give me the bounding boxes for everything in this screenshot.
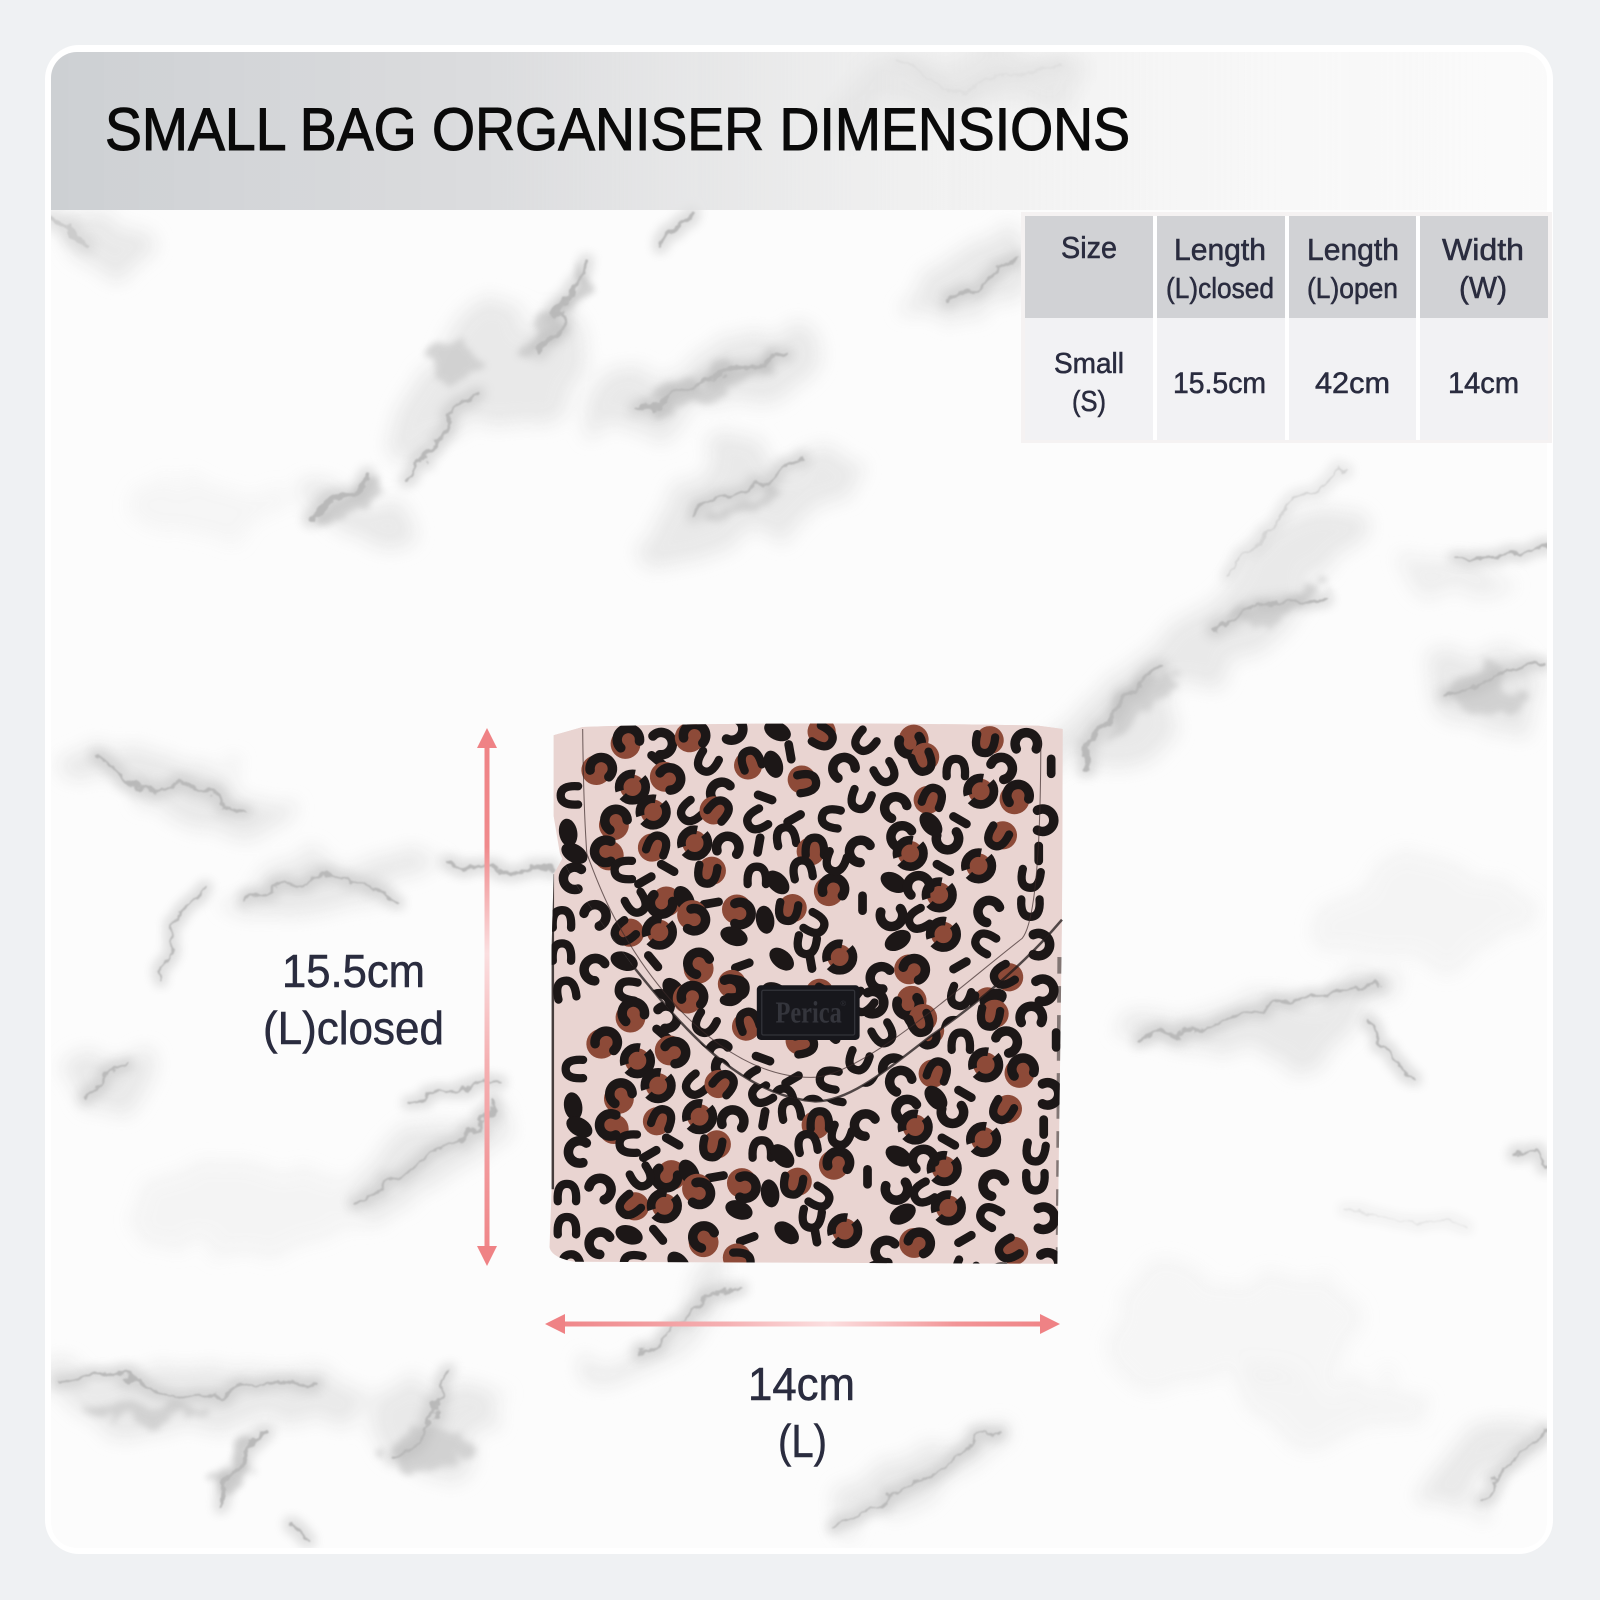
bag photo: leopard print organiser — [545, 712, 1068, 1295]
flap stitching — [583, 729, 1041, 1077]
table text: 14cm — [1448, 367, 1519, 400]
arrow: vertical dimension — [477, 728, 497, 1266]
table text: Length — [1174, 232, 1266, 267]
brand badge — [757, 985, 860, 1040]
table text: 42cm — [1315, 367, 1390, 400]
table text: Width — [1442, 232, 1524, 267]
table text: 15.5cm — [1173, 367, 1266, 400]
label: width: (L) — [778, 1415, 827, 1467]
table text: (L)closed — [1166, 273, 1274, 305]
table text: Length — [1307, 232, 1399, 267]
label: length closed: 15.5cm — [282, 945, 425, 997]
table text: (W) — [1459, 270, 1507, 305]
label: width: 14cm — [748, 1358, 855, 1410]
brand badge: ® — [841, 999, 847, 1008]
arrow: horizontal dimension — [545, 1314, 1060, 1334]
bag flap — [545, 712, 1068, 1283]
table text: (L)open — [1307, 273, 1398, 305]
table text — [1054, 230, 1524, 418]
label: length closed: (L)closed — [263, 1002, 444, 1054]
bag side binding — [546, 874, 558, 1189]
title band — [51, 52, 1116, 210]
brand badge: Perica — [775, 996, 842, 1030]
table text: (S) — [1072, 386, 1106, 418]
table row backgrounds — [1025, 216, 1548, 440]
table text: Small — [1054, 348, 1124, 380]
title: SMALL BAG ORGANISER DIMENSIONS — [105, 96, 1130, 163]
label: length closed — [263, 945, 444, 1054]
table text: Size — [1061, 230, 1117, 265]
size table — [1021, 212, 1552, 443]
label: width — [748, 1358, 855, 1467]
